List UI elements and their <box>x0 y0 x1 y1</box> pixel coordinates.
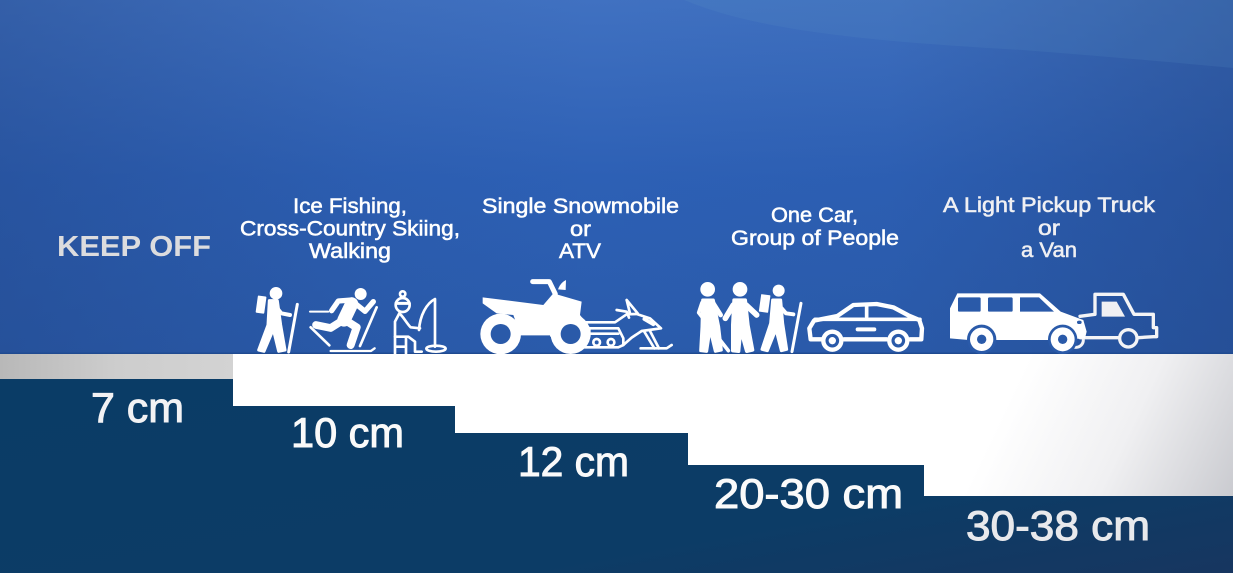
heading: one car, group of people: Group of People <box>731 226 899 250</box>
ice block: stepped safe thickness <box>233 354 1233 496</box>
heading: light pickup truck or van <box>943 193 1155 262</box>
heading: ice fishing, skiing, walking <box>240 194 460 263</box>
icon: ATV <box>480 280 591 354</box>
water below the ice <box>0 354 1233 573</box>
heading: ice fishing, skiing, walking: Cross-Country Skiing, <box>240 216 460 240</box>
icon: cross-country skier <box>310 288 377 351</box>
icon: pickup truck <box>1069 294 1157 347</box>
heading: light pickup truck or van: a Van <box>1021 238 1077 262</box>
heading: one car, group of people <box>731 203 899 250</box>
icon: ice fisher <box>395 291 446 353</box>
icon: hiker <box>256 287 297 352</box>
icon: van <box>950 293 1087 354</box>
heading: ice fishing, skiing, walking: Walking <box>309 239 391 263</box>
label: 10 cm: 10 cm <box>291 409 404 456</box>
label: 12 cm: 12 cm <box>518 438 629 485</box>
heading: snowmobile or ATV: Single Snowmobile <box>482 194 679 218</box>
heading: snowmobile or ATV <box>482 194 679 263</box>
icon: car <box>809 304 922 350</box>
icon: group of people <box>699 282 801 352</box>
label: 7 cm: 7 cm <box>91 384 184 431</box>
heading: snowmobile or ATV: ATV <box>559 239 602 263</box>
sky background <box>0 0 1233 355</box>
heading: one car, group of people: One Car, <box>771 203 858 227</box>
icon: snowmobile <box>585 300 672 348</box>
heading: snowmobile or ATV: or <box>570 217 591 241</box>
label: 30-38 cm: 30-38 cm <box>966 502 1150 549</box>
heading: light pickup truck or van: A Light Pickup Truck <box>943 193 1155 217</box>
heading: ice fishing, skiing, walking: Ice Fishing, <box>293 194 407 218</box>
heading: keep off: KEEP OFF <box>57 231 211 263</box>
ice block: keep off thickness <box>0 354 233 379</box>
heading: light pickup truck or van: or <box>1038 216 1060 240</box>
label: 20-30 cm: 20-30 cm <box>714 470 903 517</box>
